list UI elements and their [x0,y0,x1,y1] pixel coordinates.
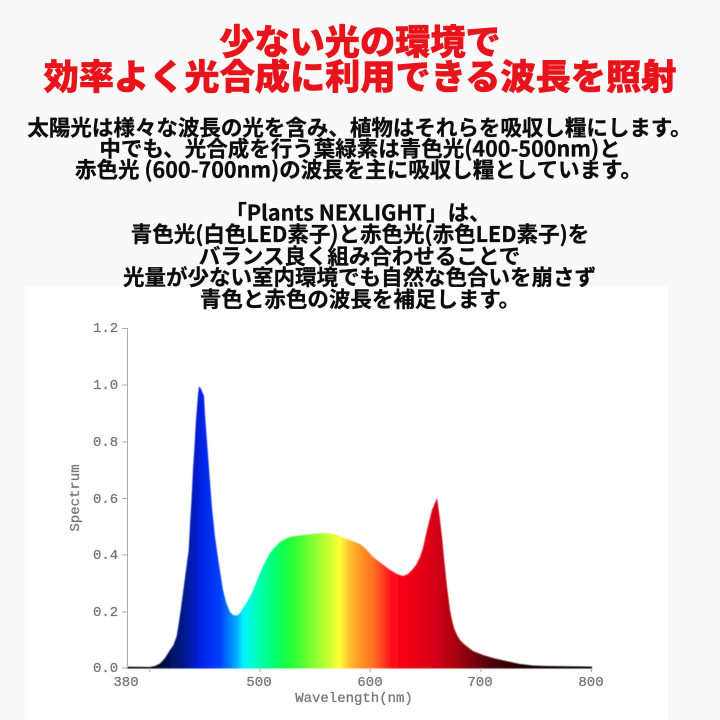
x axis tick labels: 600 [357,675,383,691]
x axis tick labels [113,675,604,691]
text block: Plants NEXLIGHT description: 光量が少ない室内環境でも自然な色合いを崩さず [123,261,596,292]
x axis title: Wavelength(nm) [295,691,413,707]
text block: Plants NEXLIGHT description [123,196,596,314]
text block: photosynthesis explanation: 太陽光は様々な波長の光を含み、植物はそれらを吸収し糧にします。 [27,112,692,142]
x axis [150,668,592,672]
title: 少ない光の環境で [219,14,501,66]
y axis tick labels: 0.6 [93,492,118,508]
spectrum area [127,386,592,668]
spectrum chart [68,321,604,707]
text block: photosynthesis explanation [27,112,692,184]
title: 効率よく光合成に利用できる波長を照射 [44,50,676,100]
x axis tick labels: 800 [578,675,604,691]
y axis tick labels: 0.8 [93,435,118,451]
text block: photosynthesis explanation: 赤色光 (600-700nm)の波長を主に吸収し糧としています。 [75,154,642,184]
y axis tick labels [93,321,118,677]
text block: Plants NEXLIGHT description: 「Plants NEXLIGHT」は、 [225,196,491,228]
text block: Plants NEXLIGHT description: 青色光(白色LED素子)と赤色光(赤色LED素子)を [131,218,589,249]
text block: Plants NEXLIGHT description: バランス良く組み合わせることで [199,240,520,271]
x axis tick labels: 700 [467,675,493,691]
y axis tick labels: 0.0 [93,661,118,677]
x axis tick labels: 380 [113,675,139,691]
y axis tick labels: 0.4 [93,548,118,564]
panel: chart background [25,286,668,720]
text block: photosynthesis explanation: 中でも、光合成を行う葉緑素は青色光(400-500nm)と [99,132,621,164]
y axis title: Spectrum [68,464,84,532]
title [44,14,676,100]
y axis [122,328,128,668]
text block: Plants NEXLIGHT description: 青色と赤色の波長を補足します。 [200,283,520,314]
y axis tick labels: 1.0 [93,378,118,394]
x axis tick labels: 500 [246,675,272,691]
y axis tick labels: 0.2 [93,605,118,621]
y axis tick labels: 1.2 [93,321,118,337]
